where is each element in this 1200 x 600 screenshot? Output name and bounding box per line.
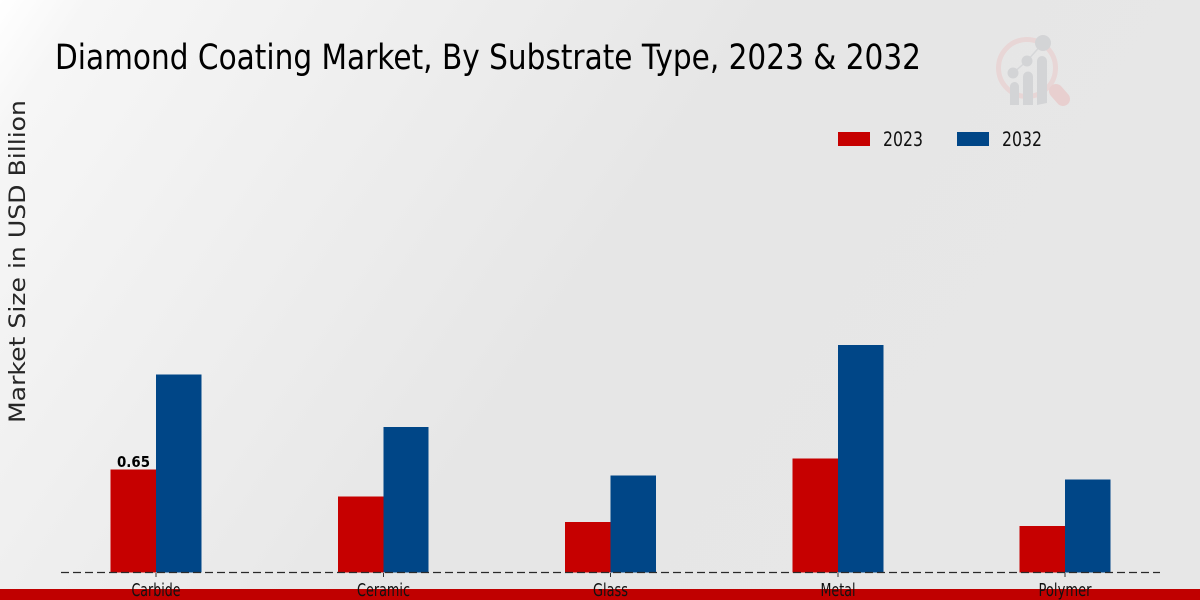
legend bbox=[838, 128, 1042, 151]
legend label 2023: 2023 bbox=[883, 128, 923, 151]
bars: Polymer bbox=[1020, 480, 1110, 572]
legend swatch 2023 bbox=[838, 132, 870, 146]
dashed baseline bbox=[61, 572, 1160, 574]
bars: Glass bbox=[565, 476, 656, 572]
data label 0.65: 0.65 bbox=[117, 453, 150, 471]
bars: Carbide bbox=[110, 374, 202, 572]
bars: Ceramic bbox=[338, 427, 428, 572]
bar chart bbox=[61, 345, 1160, 577]
watermark logo icon bbox=[998, 35, 1063, 105]
legend label 2032: 2032 bbox=[1002, 128, 1042, 151]
legend swatch 2032 bbox=[957, 132, 989, 146]
x-axis labels bbox=[132, 580, 1092, 600]
y-axis label: Market Size in USD Billion bbox=[5, 100, 31, 423]
bottom red band bbox=[0, 589, 1200, 600]
bars: Metal bbox=[792, 345, 884, 572]
title: Diamond Coating Market, By Substrate Type, 2023 & 2032 bbox=[55, 38, 921, 78]
